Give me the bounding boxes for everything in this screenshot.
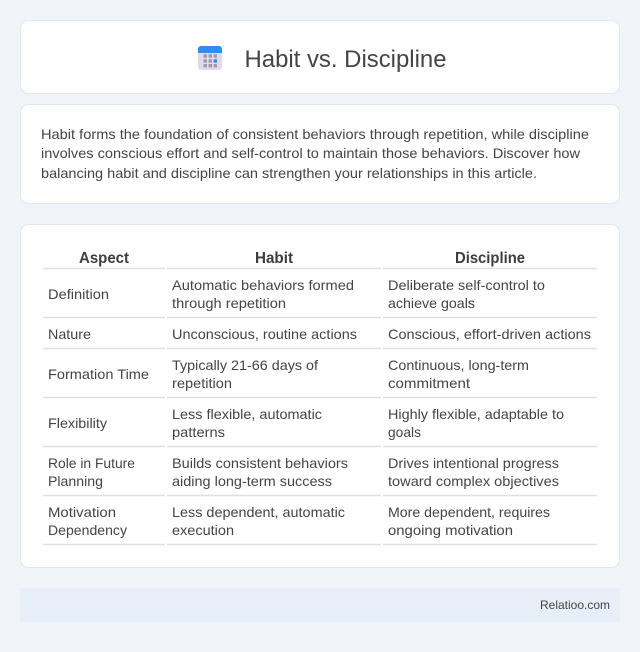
table row: definition: Deliberate self-control to <box>388 277 545 293</box>
table row: role in future planning: toward complex objectives <box>388 473 559 489</box>
table row: motivation dependency: More dependent, requires <box>388 504 550 520</box>
table row: definition: achieve goals <box>388 295 475 311</box>
table row: motivation dependency: execution <box>172 522 234 538</box>
table row: flexibility: Less flexible, automatic <box>172 406 322 422</box>
table row: motivation dependency: Dependency <box>48 522 127 538</box>
table row: formation time: Continuous, long-term <box>388 357 529 373</box>
table row: role in future planning: Role in Future <box>48 455 135 471</box>
table row: flexibility: Highly flexible, adaptable to <box>388 406 564 422</box>
text block: introduction <box>41 126 589 181</box>
footer brand: Relatioo.com <box>540 598 610 612</box>
table row: motivation dependency: ongoing motivation <box>388 522 513 538</box>
footer <box>20 588 620 622</box>
table row: flexibility: Flexibility <box>48 415 107 431</box>
table row: formation time: Formation Time <box>48 366 149 382</box>
table header row: Habit <box>255 250 294 267</box>
table row: definition <box>48 277 545 311</box>
table row: formation time: Typically 21-66 days of <box>172 357 318 373</box>
panel: introduction <box>20 104 620 204</box>
table row: flexibility: patterns <box>172 424 225 440</box>
table row: nature: Unconscious, routine actions <box>172 326 357 342</box>
table row: flexibility: goals <box>388 424 421 440</box>
text block: introduction: Habit forms the foundation of consistent behaviors through repetition, while discipline <box>41 126 589 142</box>
text block: introduction: balancing habit and discipline can strengthen your relationships in this article. <box>41 165 537 181</box>
table row: role in future planning: Builds consistent behaviors <box>172 455 348 471</box>
table row: formation time: commitment <box>388 375 470 391</box>
table row: role in future planning: Planning <box>48 473 103 489</box>
table header row <box>79 250 525 267</box>
table row: motivation dependency: Less dependent, automatic <box>172 504 345 520</box>
title: Habit vs. Discipline <box>244 46 446 73</box>
table row: nature: Conscious, effort-driven actions <box>388 326 591 342</box>
table header row: Aspect <box>79 250 130 267</box>
table row: definition: Automatic behaviors formed <box>172 277 354 293</box>
table row: role in future planning <box>48 455 559 489</box>
table row: role in future planning: aiding long-term success <box>172 473 332 489</box>
table row: formation time <box>48 357 529 391</box>
table row: nature <box>48 326 591 342</box>
table row: motivation dependency <box>48 504 550 538</box>
table header row: Discipline <box>455 250 525 267</box>
table row: role in future planning: Drives intentional progress <box>388 455 559 471</box>
panel: comparison table <box>20 224 620 568</box>
table row: nature: Nature <box>48 326 91 342</box>
table row: motivation dependency: Motivation <box>48 504 116 520</box>
text block: introduction: involves conscious effort and self-control to maintain those behaviors. Discover how <box>41 145 581 161</box>
table row: formation time: repetition <box>172 375 232 391</box>
table row: definition: through repetition <box>172 295 286 311</box>
panel: header <box>20 20 620 94</box>
table row: definition: Definition <box>48 286 109 302</box>
icon: calendar <box>198 46 222 70</box>
table row: flexibility <box>48 406 564 440</box>
